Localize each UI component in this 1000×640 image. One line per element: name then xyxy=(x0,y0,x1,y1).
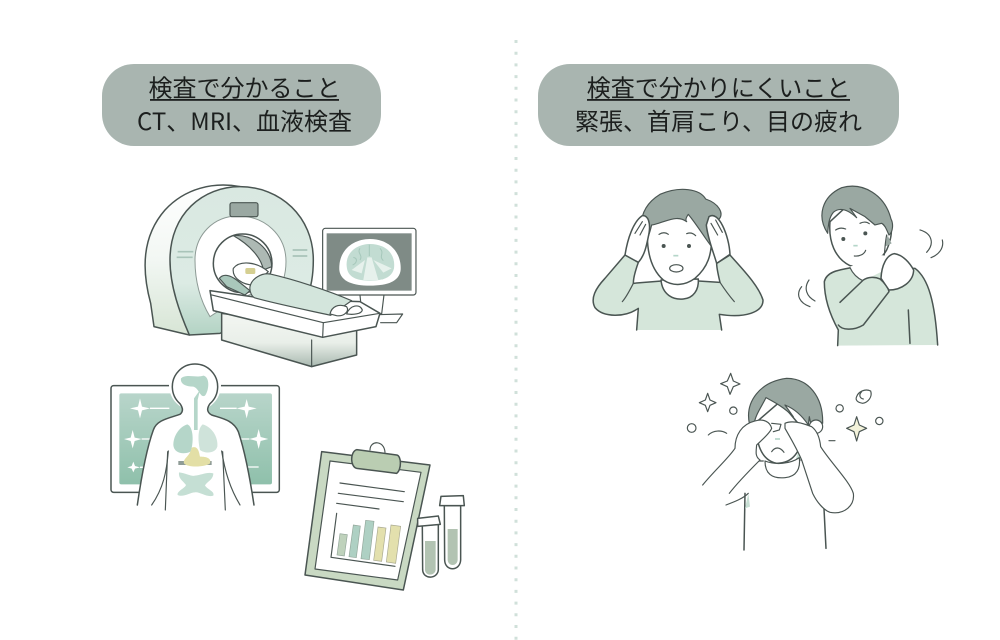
heading: what tests miss: 検査で分かりにくいこと xyxy=(587,68,850,104)
left hand xyxy=(625,216,650,262)
hand on shoulder xyxy=(881,254,914,290)
left arm and hand xyxy=(703,420,772,493)
monitor xyxy=(323,228,416,323)
illustration: MRI scanner with monitor xyxy=(145,185,416,367)
illustration: person rubbing tired eyes xyxy=(687,373,883,550)
face xyxy=(647,205,711,284)
clipboard xyxy=(305,443,430,590)
neck collar xyxy=(765,458,800,478)
face xyxy=(830,202,891,267)
right arm and hand xyxy=(785,422,853,513)
body xyxy=(744,493,826,550)
scanner body xyxy=(145,185,313,335)
illustration: clipboard and test tubes xyxy=(305,443,464,590)
hair xyxy=(822,186,893,235)
nose bridge xyxy=(772,423,781,432)
eyes and smile xyxy=(836,222,869,256)
illustration: body scan xyxy=(111,359,279,510)
body silhouette xyxy=(137,359,254,510)
text lines xyxy=(337,483,404,509)
shadow marks xyxy=(745,452,802,508)
scan screen xyxy=(111,386,279,492)
sweater xyxy=(593,255,763,330)
sparkles and marks xyxy=(687,373,883,441)
bar chart xyxy=(331,513,401,566)
brain scan xyxy=(339,239,401,286)
sweater xyxy=(824,268,938,346)
test tube left xyxy=(418,516,440,577)
arm creases xyxy=(622,282,734,302)
neck xyxy=(661,279,698,299)
text: test names: CT、MRI、血液検査 xyxy=(137,102,352,137)
heading: what tests reveal: 検査で分かること xyxy=(148,68,340,104)
hair xyxy=(641,189,721,247)
raised arm xyxy=(838,277,889,329)
eyes and mouth xyxy=(659,233,696,272)
illustration: person with stiff shoulder xyxy=(799,186,943,346)
hair xyxy=(749,378,823,425)
head xyxy=(755,402,805,463)
panel: left heading xyxy=(102,64,381,146)
mouth xyxy=(772,448,784,452)
text: symptoms: 緊張、首肩こり、目の疲れ xyxy=(575,102,862,137)
panel: right heading xyxy=(538,64,899,146)
nape xyxy=(885,235,892,247)
illustration: person holding head (tension) xyxy=(593,189,763,330)
sleeve fold xyxy=(908,310,910,343)
organs xyxy=(173,376,217,496)
neck xyxy=(850,255,883,280)
patient xyxy=(219,263,362,316)
right hand xyxy=(706,216,730,263)
test tube right xyxy=(440,496,464,569)
motion marks xyxy=(799,230,943,307)
patient table xyxy=(210,291,380,367)
